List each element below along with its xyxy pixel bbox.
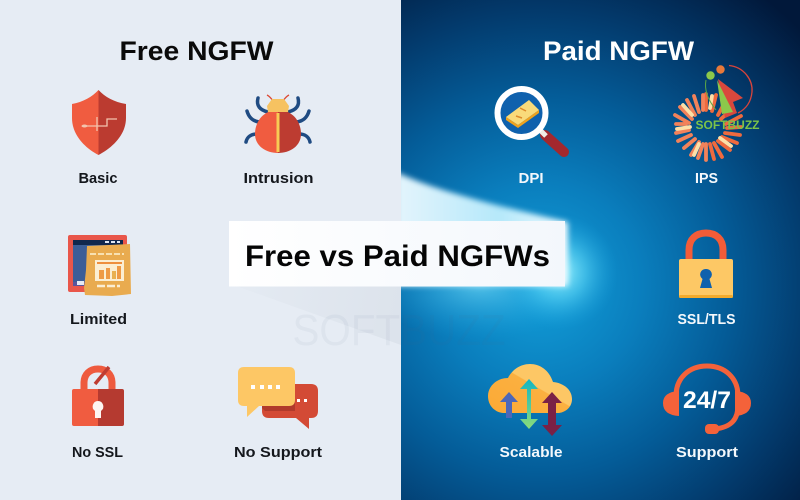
panel: free NGFW (0, 0, 401, 500)
label: IPS: IPS (695, 170, 718, 187)
icon: shield (72, 90, 126, 155)
heading: Free NGFW: Free NGFW (120, 36, 274, 66)
label: Scalable: Scalable (500, 444, 562, 461)
label: No SSL: No SSL (72, 444, 123, 461)
label: DPI: DPI (518, 170, 544, 187)
icon: 24/7 headset (663, 366, 751, 434)
label: Support: Support (676, 444, 738, 461)
icon: 24/7 headset: 24/7 (683, 387, 731, 414)
panel: paid NGFW (396, 0, 800, 500)
watermark: SOFTBUZZ (292, 306, 506, 355)
label: SSL/TLS: SSL/TLS (678, 311, 736, 328)
burst (675, 94, 741, 160)
logo text: SOFTBUZZ (696, 118, 760, 132)
icon: magnifier (498, 89, 564, 152)
label: No Support: No Support (234, 444, 322, 461)
heading: Paid NGFW: Paid NGFW (543, 36, 695, 66)
label: Basic: Basic (78, 170, 118, 187)
label: Limited: Limited (70, 311, 127, 328)
title banner: Free vs Paid NGFWs (245, 240, 550, 273)
icon: limited dashboard (68, 235, 131, 296)
icon: bug (246, 95, 310, 153)
icon: chat bubbles (238, 367, 318, 429)
icon: IPS burst with SOFTBUZZ logo (675, 65, 760, 160)
icon: broken lock (72, 367, 124, 426)
icon: padlock (679, 233, 733, 298)
label: Intrusion: Intrusion (244, 170, 314, 187)
light streak (401, 169, 607, 324)
icon: scalable cloud (488, 364, 572, 436)
logo mark (705, 65, 752, 118)
title shadow (236, 286, 401, 345)
title banner (229, 221, 565, 286)
